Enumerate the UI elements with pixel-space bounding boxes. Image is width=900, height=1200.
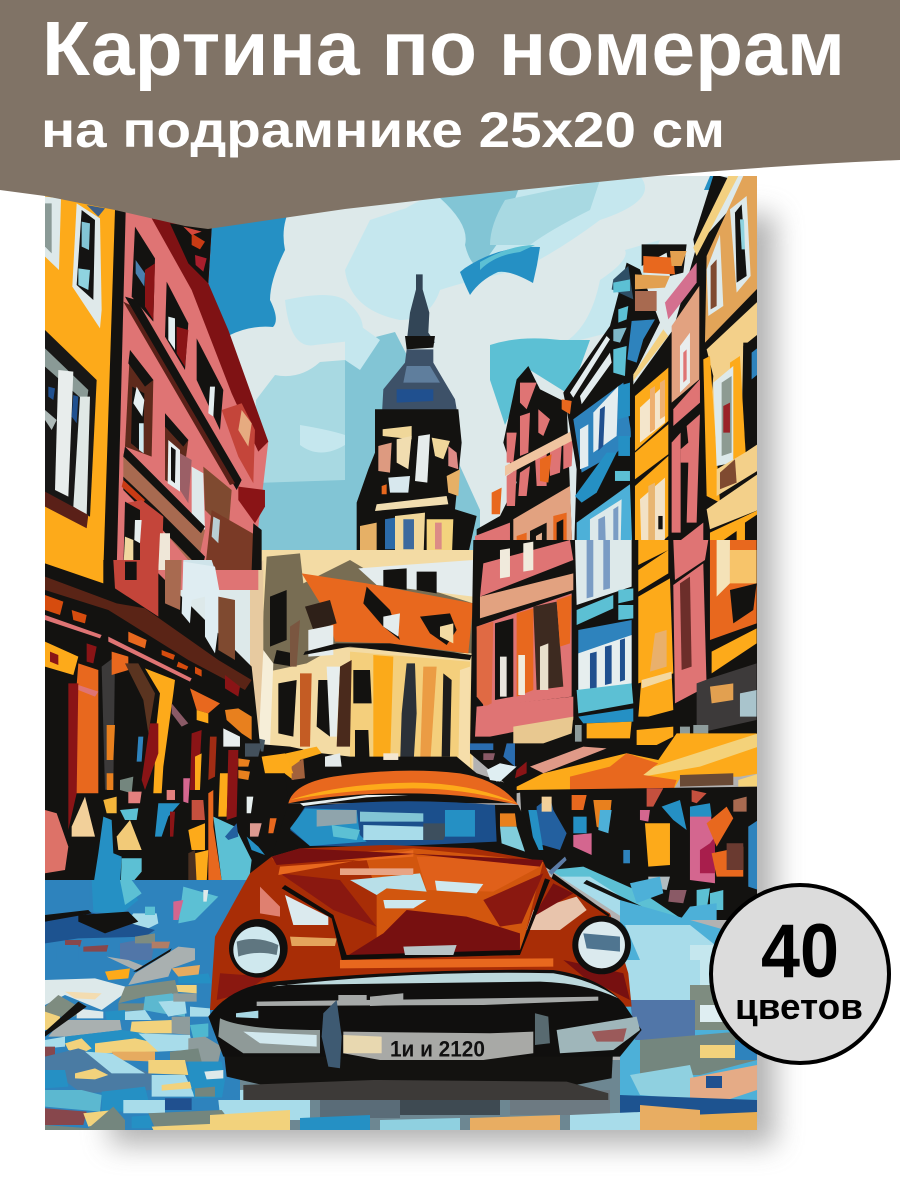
licence plate bumper [343,1032,533,1060]
vintage red car: 1и и 2120 [390,1037,485,1062]
header banner [0,0,900,229]
lower right facades, shops and awnings [470,540,760,920]
title: Картина по номерам [42,6,845,92]
right colourful facades [475,262,660,540]
windscreen [290,801,497,847]
street figures [45,810,68,873]
chrome trim and grille [208,970,642,1057]
vintage red car [208,771,642,1100]
left red building [103,210,268,590]
badge: 40 colours [711,885,889,1063]
left arcade storefront [45,560,294,880]
badge: 40 colours: цветов [735,986,863,1027]
sky [180,176,744,665]
painting on canvas [45,176,760,1133]
right headlight [572,916,631,974]
canvas shadow [110,215,775,1145]
windscreen surround [272,803,543,860]
car roof [288,771,518,805]
yellow and pink facades [630,176,757,540]
left yellow building [45,190,117,590]
badge: 40 colours: 40 [761,909,839,994]
church tower [357,274,477,576]
car hood and body [210,845,632,1010]
cobblestone street right and bottom [210,900,760,1130]
cobblestone street left [45,880,252,1133]
left headlight [229,919,288,978]
car shadow [224,1056,613,1084]
subtitle: на подрамнике 25х20 см [41,102,725,158]
central buildings with orange roof [250,550,517,803]
